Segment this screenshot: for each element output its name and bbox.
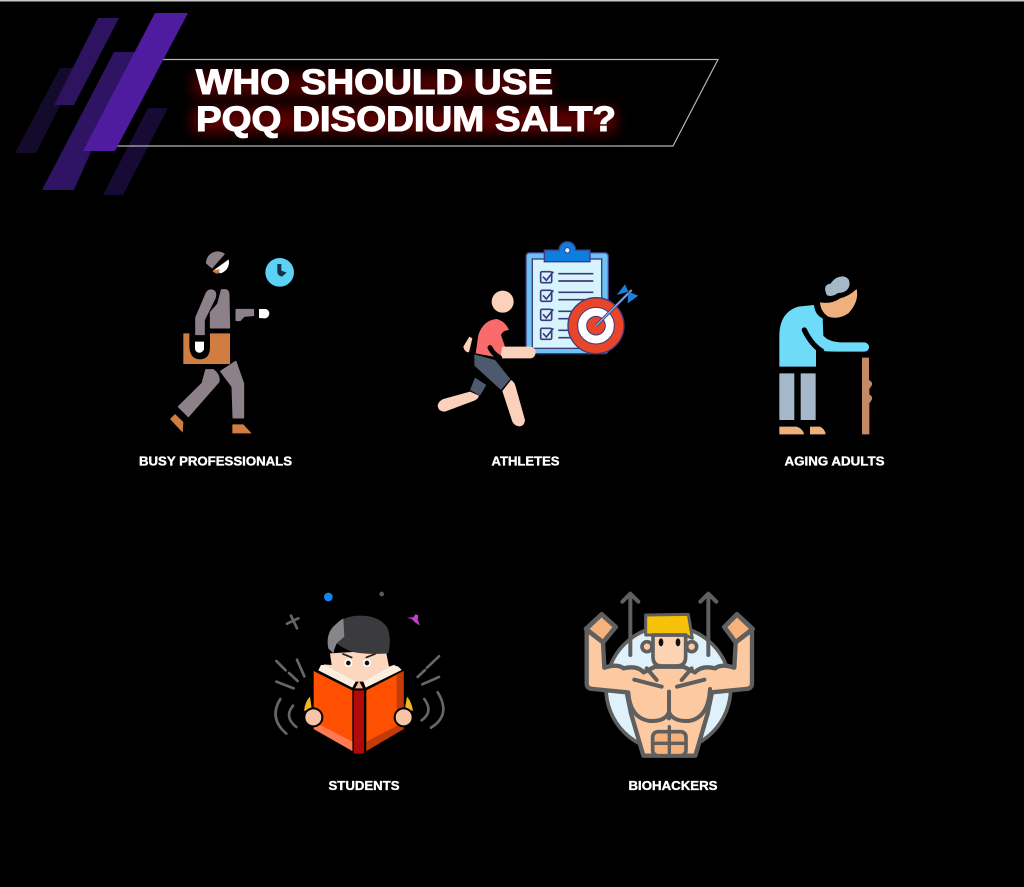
title: WHO SHOULD USE xyxy=(196,62,553,102)
panel: busy professionals xyxy=(139,251,294,468)
panel: athletes xyxy=(438,242,638,468)
icon: runner with clipboard and target xyxy=(438,242,638,426)
main purple slash xyxy=(83,13,188,151)
panel: students xyxy=(276,592,443,793)
panel: biohackers xyxy=(586,594,753,793)
label: ATHLETES xyxy=(492,454,560,468)
icon: elderly person with cane xyxy=(779,276,872,434)
title xyxy=(196,62,616,139)
label: STUDENTS xyxy=(328,779,400,793)
icon: student reading a book xyxy=(276,592,443,754)
icon: muscular man with arrows xyxy=(586,594,753,756)
label: AGING ADULTS xyxy=(784,454,884,468)
icon: walking professional xyxy=(170,251,294,433)
decorative purple slashes xyxy=(15,18,168,195)
title: PQQ DISODIUM SALT? xyxy=(196,99,616,139)
header banner xyxy=(15,13,718,195)
title glow xyxy=(192,74,616,133)
label: BIOHACKERS xyxy=(628,779,718,793)
panel: aging adults xyxy=(779,276,884,468)
title frame xyxy=(116,60,718,146)
label: BUSY PROFESSIONALS xyxy=(139,454,292,468)
